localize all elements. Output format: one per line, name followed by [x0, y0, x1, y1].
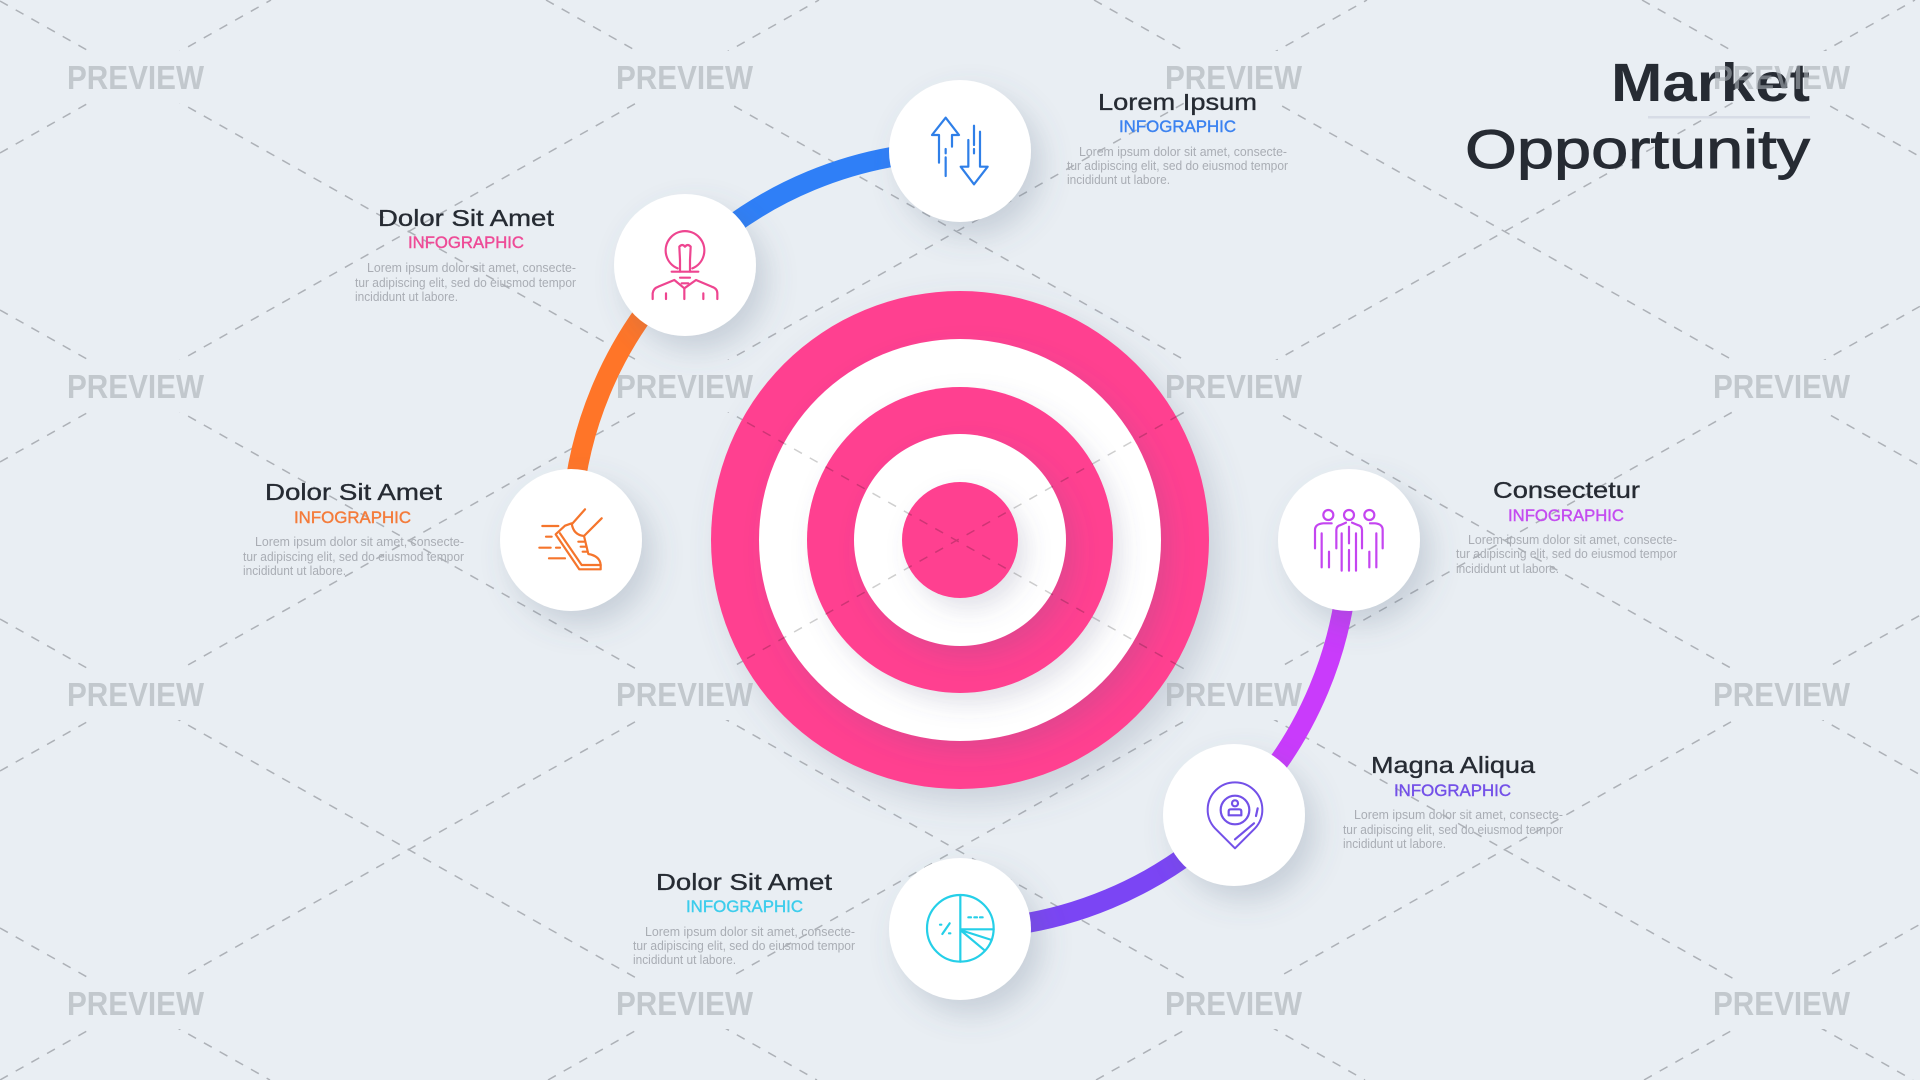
icon: location pin with person	[1208, 782, 1262, 848]
node: upper left, bulb person	[614, 194, 756, 336]
label: Lorem Ipsum	[1067, 89, 1288, 187]
label: Dolor Sit Amet, orange: Lorem ipsum dolor sit amet, consecte-	[255, 535, 464, 549]
node: bottom, pie chart	[889, 858, 1031, 1000]
node: left, running shoe	[500, 469, 642, 611]
label: Dolor Sit Amet, pink	[355, 205, 576, 304]
title	[1465, 53, 1811, 180]
icon: three people	[1315, 510, 1383, 571]
label: Dolor Sit Amet, orange: Dolor Sit Amet	[265, 479, 443, 505]
label: Dolor Sit Amet, orange: INFOGRAPHIC	[294, 509, 411, 527]
watermark text: PREVIEW	[616, 368, 754, 405]
watermark text: PREVIEW	[67, 368, 205, 405]
watermark text: PREVIEW	[616, 59, 754, 96]
label: Consectetur	[1456, 477, 1677, 576]
watermark text: PREVIEW	[616, 985, 754, 1022]
arc: orange segment	[571, 265, 685, 540]
label: Magna Aliqua: incididunt ut labore.	[1343, 837, 1446, 851]
label: Dolor Sit Amet, pink: tur adipiscing elit, sed do eiusmod tempor	[355, 276, 576, 290]
label: Lorem Ipsum: INFOGRAPHIC	[1119, 118, 1236, 136]
watermark text: PREVIEW	[1165, 368, 1303, 405]
label: Dolor Sit Amet, pink: incididunt ut labore.	[355, 290, 458, 304]
label: Consectetur: Consectetur	[1493, 477, 1640, 503]
label: Dolor Sit Amet, pink: Lorem ipsum dolor sit amet, consecte-	[367, 261, 576, 275]
watermark text: PREVIEW	[1713, 985, 1851, 1022]
watermark text: PREVIEW	[1713, 676, 1851, 713]
title: Opportunity	[1465, 118, 1811, 180]
label: Consectetur: incididunt ut labore.	[1456, 562, 1559, 576]
label: Dolor Sit Amet, pink: Dolor Sit Amet	[378, 205, 555, 231]
label: Dolor Sit Amet, orange: tur adipiscing elit, sed do eiusmod tempor	[243, 550, 464, 564]
label: Magna Aliqua: Lorem ipsum dolor sit amet, consecte-	[1354, 808, 1563, 822]
label: Dolor Sit Amet, cyan: Lorem ipsum dolor sit amet, consecte-	[645, 925, 855, 939]
arc: blue segment	[685, 151, 960, 265]
watermark text: PREVIEW	[1165, 676, 1303, 713]
label: Dolor Sit Amet, cyan: INFOGRAPHIC	[686, 898, 803, 916]
label: Magna Aliqua: INFOGRAPHIC	[1394, 782, 1511, 800]
watermark text: PREVIEW	[1713, 368, 1851, 405]
arc: violet segment	[960, 815, 1234, 929]
label: Dolor Sit Amet, pink: INFOGRAPHIC	[408, 234, 524, 252]
label: Lorem Ipsum: tur adipiscing elit, sed do eiusmod tempor	[1067, 159, 1288, 173]
label: Dolor Sit Amet, cyan	[633, 869, 855, 967]
watermark text: PREVIEW	[67, 59, 205, 96]
watermark text: PREVIEW	[1165, 59, 1303, 96]
label: Dolor Sit Amet, cyan: tur adipiscing elit, sed do eiusmod tempor	[633, 939, 855, 953]
watermark text: PREVIEW	[616, 676, 754, 713]
label: Magna Aliqua: Magna Aliqua	[1371, 752, 1535, 778]
label: Dolor Sit Amet, orange: incididunt ut labore.	[243, 564, 346, 578]
icon: up and down arrows	[932, 118, 988, 184]
title: Market	[1611, 53, 1810, 113]
label: Dolor Sit Amet, cyan: Dolor Sit Amet	[656, 869, 833, 895]
central target	[700, 291, 1220, 789]
arc: magenta segment	[1234, 540, 1349, 815]
label: Magna Aliqua	[1343, 752, 1563, 851]
label: Consectetur: INFOGRAPHIC	[1508, 507, 1624, 525]
label: Lorem Ipsum: Lorem ipsum dolor sit amet, consecte-	[1079, 145, 1287, 159]
watermark text: PREVIEW	[67, 676, 205, 713]
node: top, arrows	[889, 80, 1031, 222]
label: Magna Aliqua: tur adipiscing elit, sed do eiusmod tempor	[1343, 823, 1563, 837]
node: lower right, location pin	[1163, 744, 1305, 886]
node: right, people	[1278, 469, 1420, 611]
label: Consectetur: Lorem ipsum dolor sit amet, consecte-	[1468, 533, 1677, 547]
label: Consectetur: tur adipiscing elit, sed do eiusmod tempor	[1456, 547, 1677, 561]
label: Dolor Sit Amet, cyan: incididunt ut labore.	[633, 953, 736, 967]
watermark text: PREVIEW	[67, 985, 205, 1022]
label: Lorem Ipsum: Lorem Ipsum	[1098, 89, 1257, 115]
label: Lorem Ipsum: incididunt ut labore.	[1067, 173, 1170, 187]
icon: bulb head person	[653, 231, 717, 299]
watermark text: PREVIEW	[1713, 59, 1851, 96]
icon: running shoe	[539, 509, 602, 569]
icon: pie chart	[927, 895, 994, 962]
label: Dolor Sit Amet, orange	[243, 479, 464, 578]
watermark text: PREVIEW	[1165, 985, 1303, 1022]
